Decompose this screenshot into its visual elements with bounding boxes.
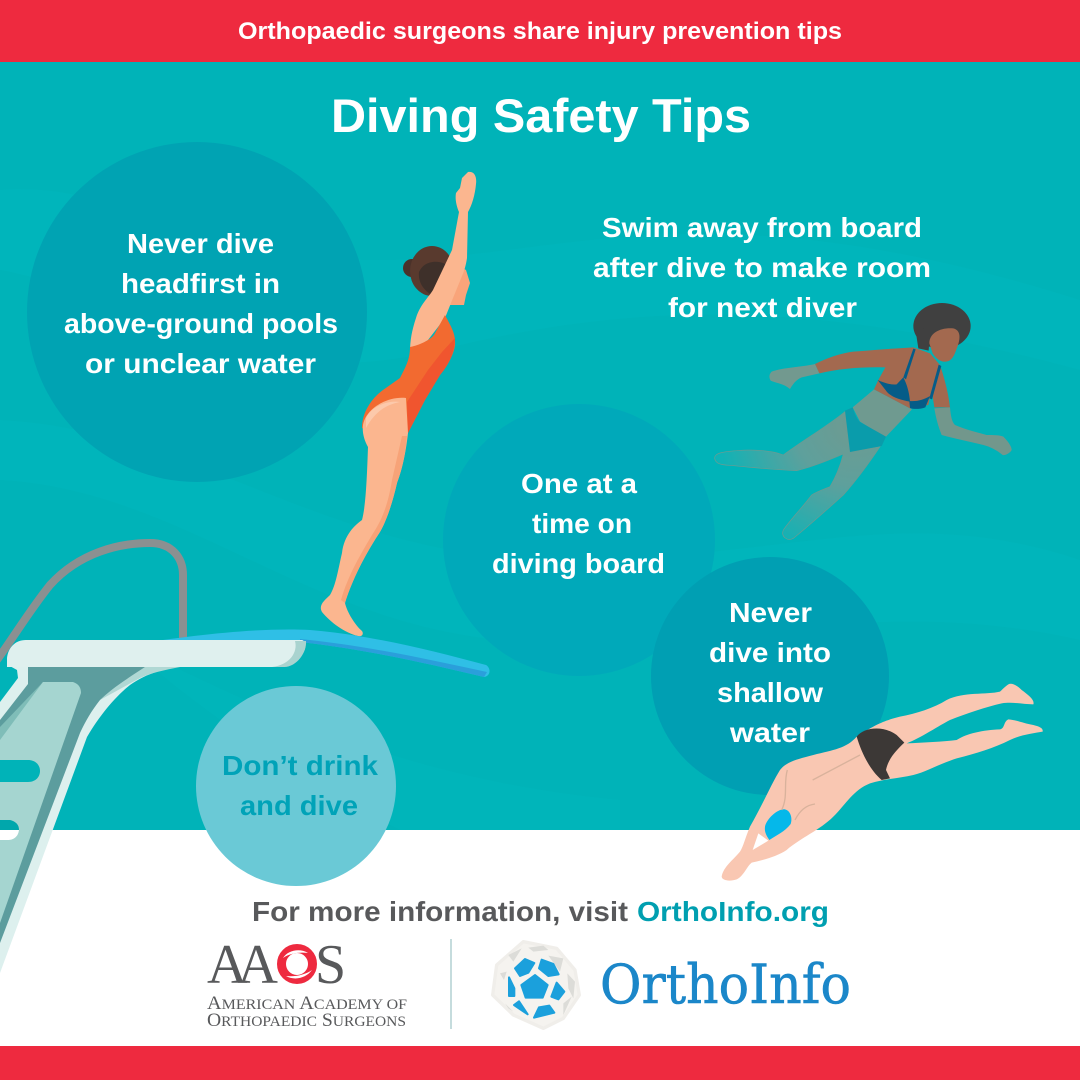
tip text: swim away: after dive to make room	[593, 252, 931, 283]
board support outer	[0, 665, 192, 973]
tip circle: one at a time	[443, 404, 715, 676]
AAOS logo: ORTHOPAEDIC SURGEONS	[207, 1010, 406, 1031]
tip circle: shallow water: shallow	[717, 677, 823, 708]
AAOS logo: AMERICAN ACADEMY OF	[207, 993, 407, 1014]
tip circle: never dive headfirst: above-ground pools	[64, 308, 338, 339]
footer banner	[0, 1046, 1080, 1080]
tip text: swim away: Swim away from board	[602, 212, 922, 243]
water background	[0, 62, 1080, 830]
footer call to action: For more information, visit	[252, 896, 628, 927]
OrthoInfo ball icon	[493, 942, 579, 1028]
tip circle: one at a time: One at a	[521, 468, 637, 499]
logo divider	[450, 939, 452, 1029]
swimmer underwater legs	[715, 411, 880, 539]
AAOS logo: S	[315, 934, 346, 996]
support hole lower	[0, 820, 19, 840]
diving board	[0, 543, 490, 973]
tip circle: one at a time: time on	[532, 508, 632, 539]
header banner: Orthopaedic surgeons share injury prevention tips	[238, 18, 842, 45]
AAOS logo: AA	[207, 934, 279, 996]
male diver cap	[765, 809, 791, 840]
male diver body	[722, 684, 1043, 881]
tip circle: don't drink and dive	[196, 686, 396, 886]
swimmer hair	[913, 303, 971, 349]
tip circle: don't drink and dive: and dive	[240, 790, 358, 821]
tip text: swim away: for next diver	[668, 292, 857, 323]
diver leg shadow	[341, 436, 407, 603]
diver illustration	[321, 172, 476, 636]
tip circle: never dive headfirst	[27, 142, 367, 482]
diver swimsuit shadow	[407, 338, 455, 433]
tip circle: shallow water: dive into	[709, 637, 831, 668]
tip circle: one at a time: diving board	[492, 548, 665, 579]
swimmer bikini top	[878, 349, 941, 409]
tip circle: don't drink and dive: Don’t drink	[222, 750, 378, 781]
tip text: swim away	[593, 212, 931, 323]
tip circle: never dive headfirst: headfirst in	[121, 268, 280, 299]
springboard	[163, 629, 490, 677]
tip circle: shallow water	[651, 557, 889, 795]
white lower area	[0, 830, 1080, 1046]
board support wedge	[0, 682, 60, 760]
OrthoInfo wordmark: OrthoInfo	[600, 953, 851, 1016]
footer call to action: OrthoInfo.org	[637, 896, 829, 927]
AAOS red ring	[282, 948, 312, 980]
swimmer underwater hand	[769, 364, 819, 389]
footer call to action	[252, 896, 829, 927]
male diver gap	[753, 833, 768, 850]
board platform tip shade	[272, 641, 306, 667]
handrail	[0, 543, 183, 660]
diver face	[445, 262, 470, 305]
title: Diving Safety Tips	[331, 89, 751, 142]
board support shadow	[0, 667, 145, 943]
swimmer upper body	[815, 347, 950, 408]
diver hip highlight	[366, 402, 400, 428]
swimmer underwater arm	[934, 407, 1012, 455]
support hole upper	[0, 760, 40, 782]
header banner	[0, 0, 1080, 62]
diver arm and torso	[410, 172, 476, 352]
tip circle: never dive headfirst: Never dive	[127, 228, 274, 259]
swimmer illustration	[715, 303, 1012, 539]
male diver illustration	[722, 684, 1043, 881]
tip circle: shallow water: Never	[729, 597, 812, 628]
diver hair	[403, 246, 454, 296]
board platform	[7, 640, 305, 667]
diver swimsuit	[362, 315, 455, 433]
tip circle: shallow water: water	[729, 717, 810, 748]
male diver muscle lines	[782, 755, 860, 820]
tip circle: never dive headfirst: or unclear water	[85, 348, 316, 379]
AAOS logo	[207, 934, 407, 1031]
male diver trunks	[857, 729, 904, 780]
swimmer bikini bottom	[845, 407, 886, 452]
swimmer face	[929, 328, 960, 362]
board support panel	[0, 682, 81, 923]
springboard shade	[300, 639, 487, 677]
board support band	[100, 667, 180, 700]
swimmer underwater torso	[853, 389, 912, 437]
diver leg	[321, 398, 408, 636]
